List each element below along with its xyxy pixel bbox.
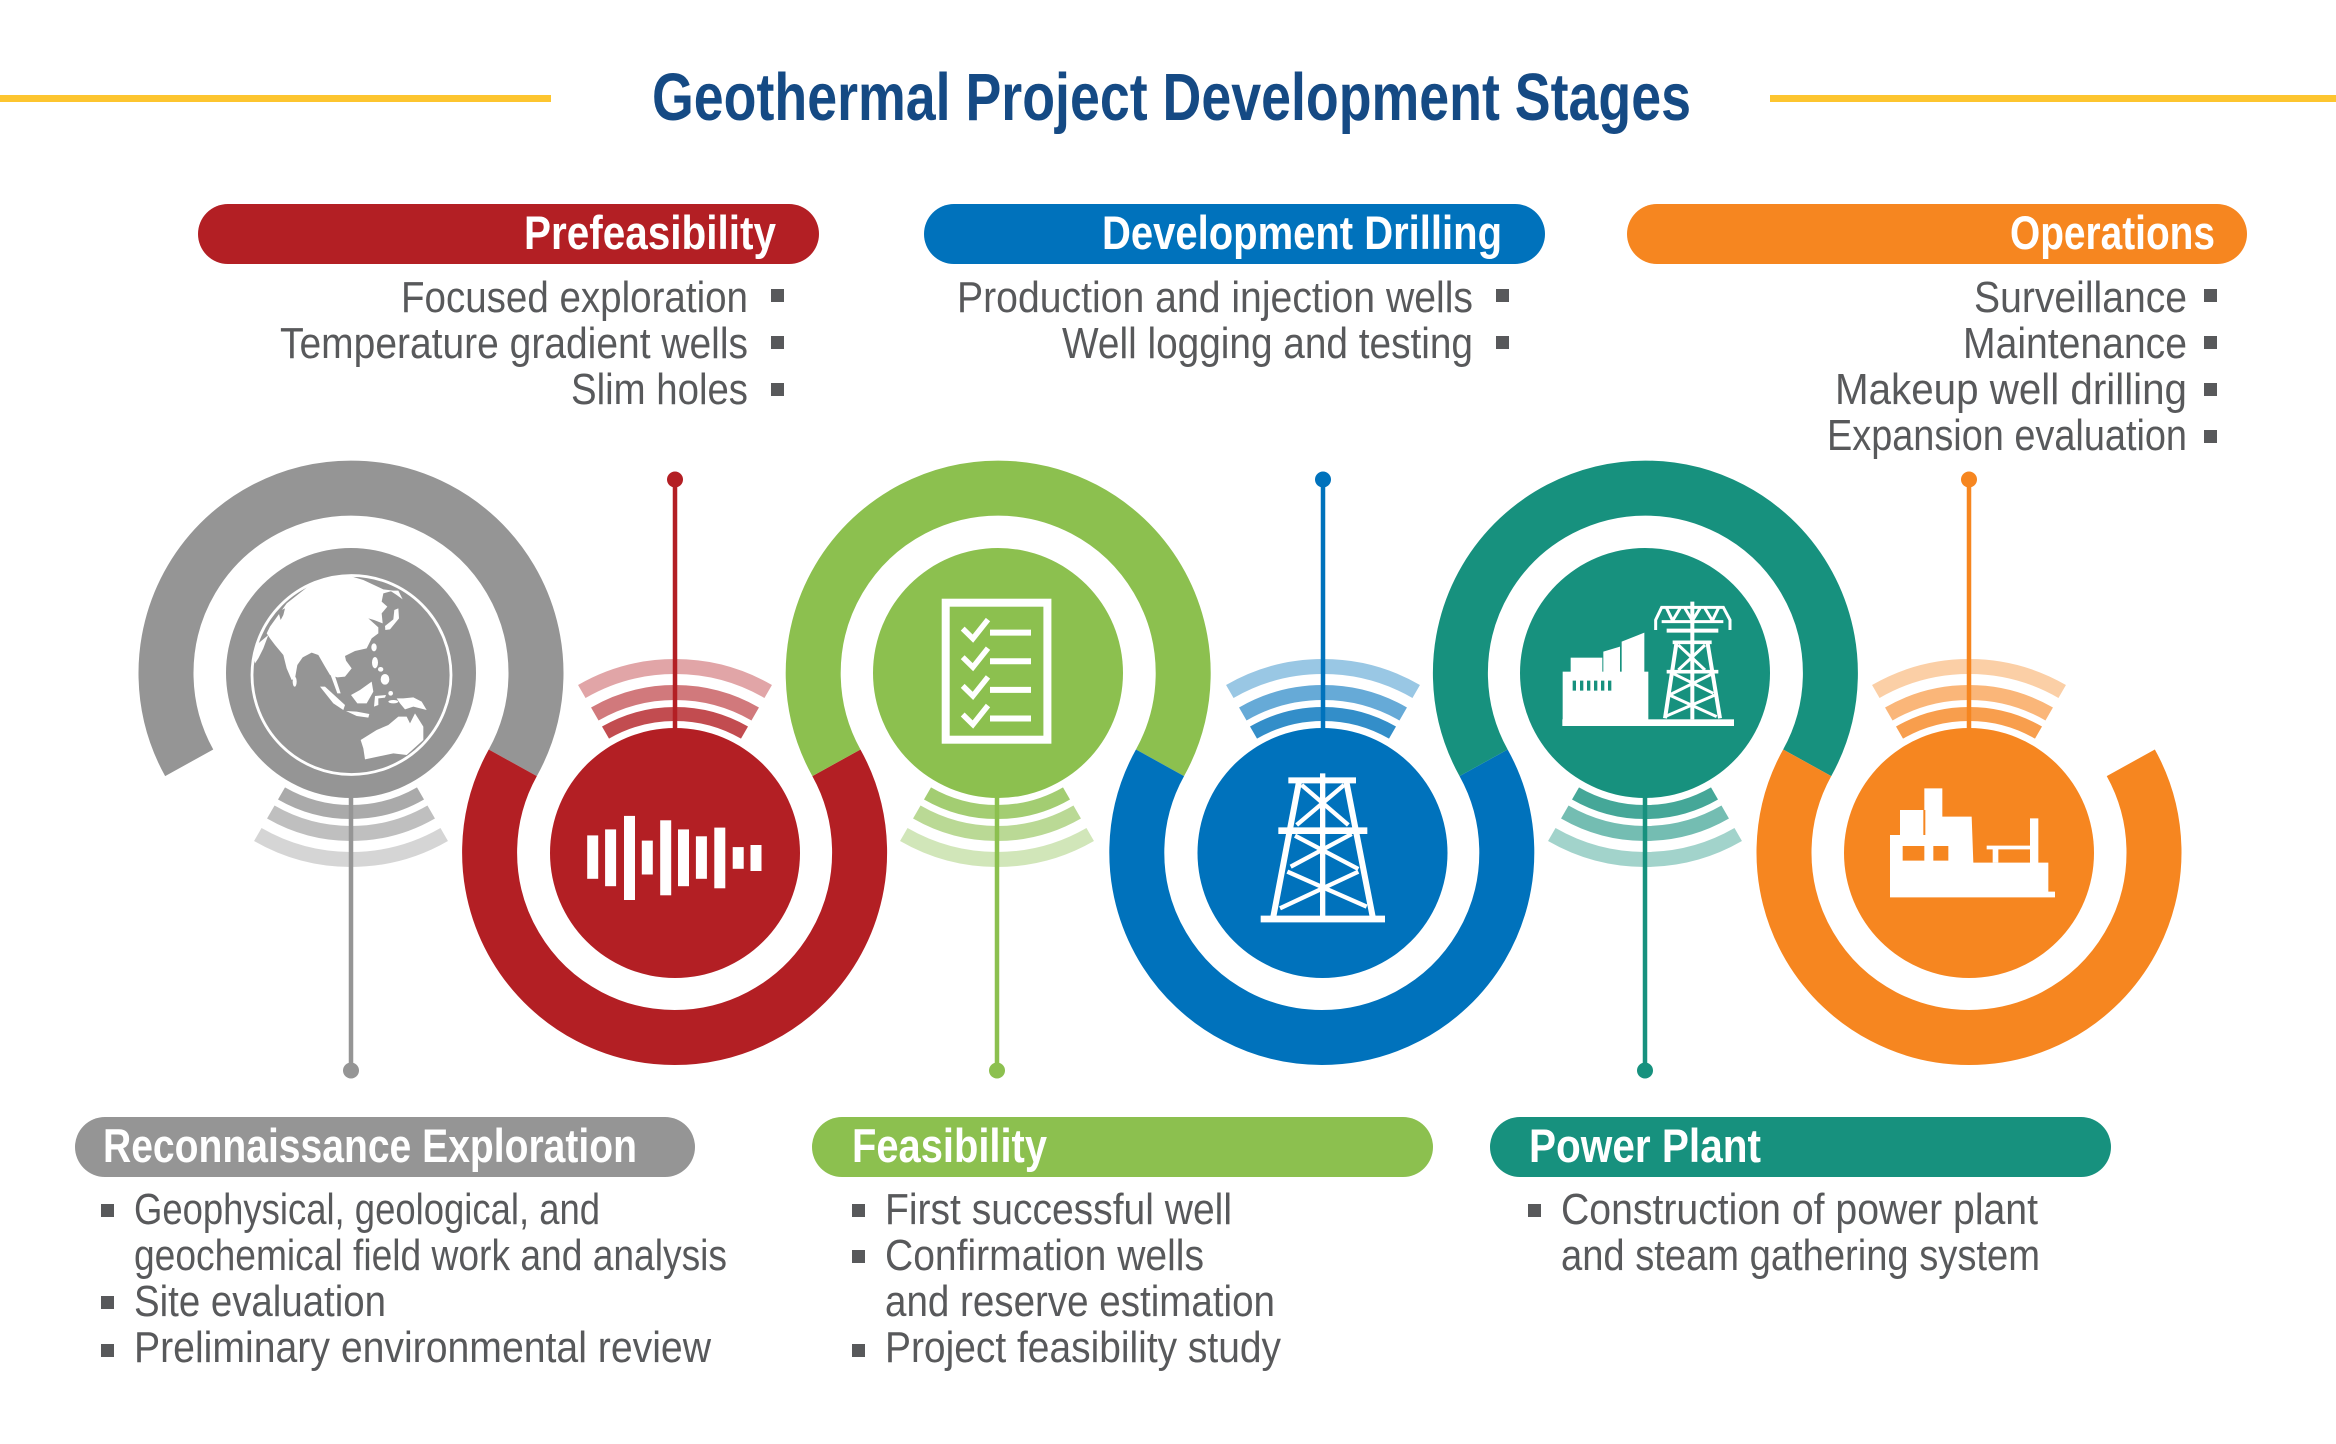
panel: Feasibility: Feasibility [852,1119,1047,1172]
icon: power plant and pylon [1562,602,1734,726]
panel: Operations: Expansion evaluation [1827,411,2187,460]
panel: Development Drilling: Production and injection wells [957,273,1473,322]
stage 3: feasibility node [873,548,1123,1078]
panel: Operations: Surveillance [1974,273,2187,322]
panel: Prefeasibility: Prefeasibility [524,206,776,259]
panel: Operations: Makeup well drilling [1835,365,2187,414]
panel: Prefeasibility [198,204,819,414]
stage 6: operations node [1844,472,2094,978]
icon: sound wave [587,816,762,900]
panel: Reconnaissance Exploration: Preliminary environmental review [134,1323,711,1372]
icon: industrial facility [1890,788,2055,897]
panel: Power Plant: Construction of power plant [1561,1185,2038,1234]
panel: Development Drilling [924,204,1545,368]
panel: Feasibility [812,1117,1433,1372]
stage 5: power plant node [1520,548,1770,1078]
stage 4: development drilling node [1198,472,1448,978]
panel: Development Drilling: Development Drilling [1102,206,1502,259]
title with rules [0,60,2336,135]
panel: Operations [1627,204,2247,460]
panel: Reconnaissance Exploration: geochemical field work and analysis [134,1231,727,1280]
panel: Feasibility: Project feasibility study [885,1323,1281,1372]
heading: title: Geothermal Project Development Stages [652,60,1691,135]
panel: Feasibility: and reserve estimation [885,1277,1275,1326]
panel: Development Drilling: Well logging and testing [1062,319,1473,368]
panel: Reconnaissance Exploration: Reconnaissance Exploration [103,1119,637,1172]
stage 2: prefeasibility node [550,472,800,978]
panel: Prefeasibility: Temperature gradient wells [280,319,748,368]
icon: drilling derrick [1261,773,1385,919]
panel: Prefeasibility: Slim holes [571,365,748,414]
serpentine ribbon [166,488,2154,1037]
panel: Reconnaissance Exploration: Geophysical, geological, and [134,1185,600,1234]
panel: Power Plant: Power Plant [1529,1119,1761,1172]
panel: Prefeasibility: Focused exploration [401,273,748,322]
panel: Reconnaissance Exploration [75,1117,727,1372]
icon: globe [252,576,451,774]
panel: Power Plant [1490,1117,2111,1280]
panel: Operations: Operations [2010,206,2215,259]
stage 1: reconnaissance node [226,548,476,1078]
icon: checklist [946,603,1047,740]
panel: Feasibility: Confirmation wells [885,1231,1204,1280]
panel: Reconnaissance Exploration: Site evaluation [134,1277,386,1326]
panel: Power Plant: and steam gathering system [1561,1231,2040,1280]
panel: Operations: Maintenance [1963,319,2187,368]
panel: Feasibility: First successful well [885,1185,1232,1234]
